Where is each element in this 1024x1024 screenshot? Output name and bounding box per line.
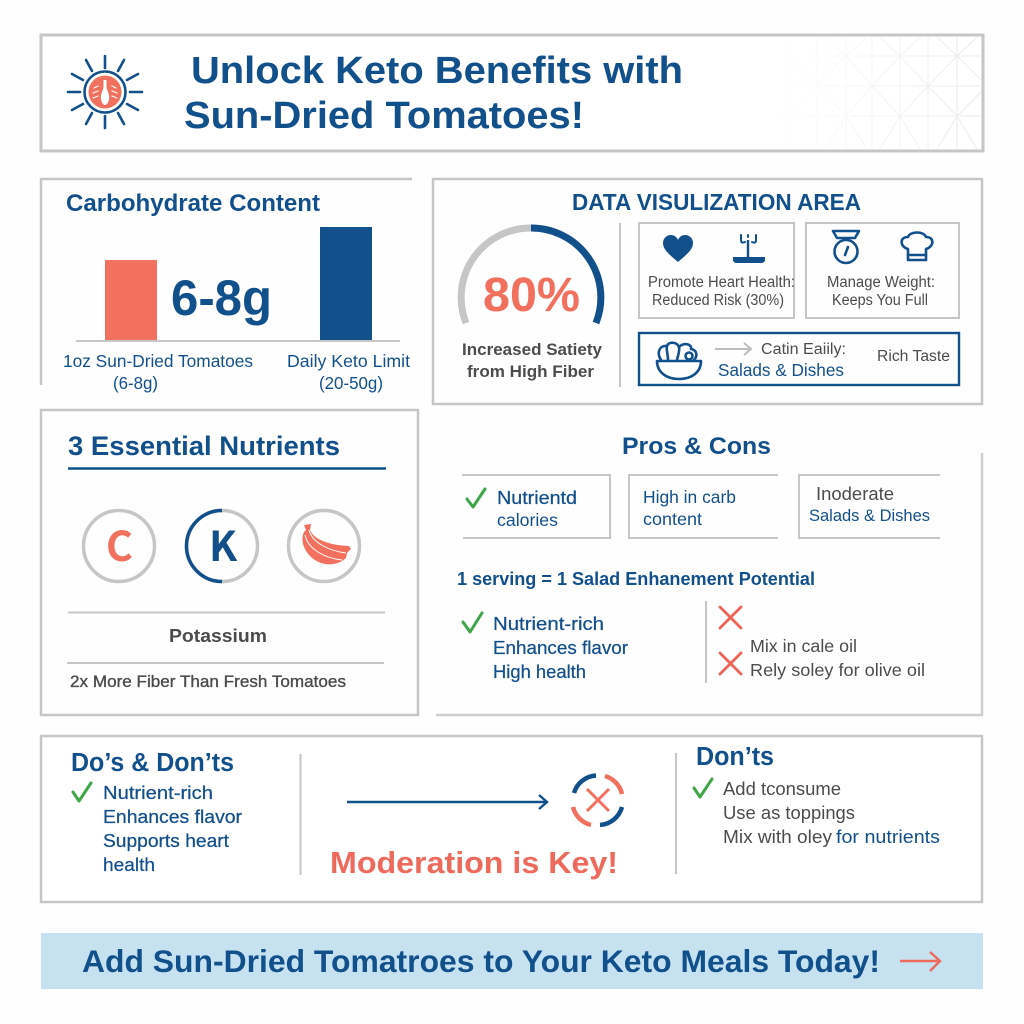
- arrow: [347, 795, 547, 809]
- bar chart: [63, 227, 410, 393]
- arrow: [715, 343, 751, 355]
- do's list: health: [103, 854, 155, 875]
- bar chart: 6-8g: [171, 270, 272, 326]
- call to action banner: [41, 933, 983, 989]
- card: nutrient calories: Nutrientd: [497, 487, 577, 508]
- pros list: Enhances flavor: [493, 637, 628, 658]
- heading: Pros & Cons: [622, 433, 771, 460]
- icon: antenna router: [733, 235, 765, 263]
- icon: cross: [720, 607, 741, 628]
- heading: don'ts: Don’ts: [696, 743, 774, 771]
- title: [184, 50, 683, 137]
- card: eat easily: [639, 333, 959, 385]
- card: heart health: Reduced Risk (30%): [652, 292, 784, 309]
- do's list: Nutrient-rich: [103, 782, 213, 803]
- title: Sun-Dried Tomatoes!: [184, 95, 584, 137]
- card: manage weight: [806, 223, 959, 318]
- icon: check: [463, 613, 482, 632]
- card: heart health: Promote Heart Health:: [648, 274, 795, 291]
- card: heart health: [639, 223, 795, 318]
- arrow: [900, 952, 940, 971]
- don'ts list: Mix with oley: [723, 827, 832, 847]
- gauge: 80% satiety: 80%: [483, 269, 580, 322]
- card: high in carb: [629, 475, 778, 538]
- panel: essential nutrients: [41, 410, 418, 715]
- bar chart: Daily Keto Limit: [287, 351, 410, 371]
- gauge: 80% satiety: from High Fiber: [467, 362, 594, 381]
- gauge: 80% satiety: [461, 228, 603, 381]
- title: Unlock Keto Benefits with: [191, 50, 683, 92]
- icon: check: [467, 489, 485, 507]
- icon: sun with tomato slice: [68, 56, 142, 128]
- do's list: [73, 782, 242, 875]
- bar chart: 1oz Sun-Dried Tomatoes: [63, 351, 253, 371]
- pros list: High health: [493, 661, 586, 682]
- pros list: [463, 613, 628, 682]
- don'ts list: for nutrients: [836, 827, 940, 847]
- don'ts list: Add tconsume: [723, 779, 841, 799]
- heading: Carbohydrate Content: [66, 190, 320, 217]
- heading: 3 Essential Nutrients: [68, 431, 340, 461]
- icon: cross: [720, 653, 741, 674]
- icon: vitamin C: [84, 510, 154, 582]
- label: potassium: Potassium: [169, 625, 267, 646]
- fiber note: 2x More Fiber Than Fresh Tomatoes: [70, 673, 346, 691]
- panel: carbohydrate content: [41, 179, 412, 393]
- gauge: 80% satiety: Increased Satiety: [462, 340, 603, 359]
- icon: banana: [288, 510, 360, 582]
- bar chart: (20-50g): [319, 373, 383, 393]
- icon: heart: [663, 235, 693, 262]
- panel: pros and cons: [436, 433, 982, 715]
- card: high in carb: content: [643, 509, 702, 529]
- cons list: Mix in cale oil: [750, 636, 857, 656]
- heading: do's: Do’s & Don’ts: [71, 749, 234, 777]
- card: eat easily: Rich Taste: [877, 348, 950, 365]
- don'ts list: [694, 779, 940, 847]
- card: moderate: Salads & Dishes: [809, 506, 930, 525]
- serving line: 1 serving = 1 Salad Enhanement Potential: [457, 569, 815, 589]
- card: manage weight: Keeps You Full: [832, 292, 928, 309]
- cons list: Rely soley for olive oil: [750, 660, 925, 680]
- do's list: Supports heart: [103, 830, 229, 851]
- icon: vitamin K: K: [209, 513, 238, 573]
- card: nutrient calories: calories: [497, 510, 558, 530]
- icon: chef hat: [902, 232, 932, 260]
- panel: data visualization area: [433, 179, 982, 404]
- card: eat easily: Salads & Dishes: [718, 360, 844, 380]
- do's list: Enhances flavor: [103, 806, 242, 827]
- icon: check: [694, 779, 712, 797]
- card: eat easily: Catin Eaiily:: [761, 341, 846, 358]
- call to action banner: Add Sun-Dried Tomatroes to Your Keto Meals Today!: [82, 943, 880, 979]
- pros list: Nutrient-rich: [493, 613, 604, 634]
- icon: vitamin C: C: [106, 513, 133, 573]
- don'ts list: Use as toppings: [723, 803, 855, 823]
- panel: do's and don'ts: [41, 736, 982, 902]
- card: moderate: Inoderate: [816, 484, 894, 504]
- card: manage weight: Manage Weight:: [827, 274, 935, 291]
- card: moderate: [799, 475, 940, 538]
- card: high in carb: High in carb: [643, 487, 736, 507]
- icon: vitamin K: [186, 510, 258, 582]
- icon: check: [73, 783, 91, 801]
- card: nutrient calories: [462, 475, 610, 538]
- icon: dashed ring with cross: [573, 776, 622, 825]
- callout: moderation: Moderation is Key!: [330, 845, 618, 880]
- heading: DATA VISULIZATION AREA: [572, 189, 861, 215]
- panel: header: [41, 35, 983, 151]
- icon: kitchen scale: [833, 231, 859, 263]
- bar chart: (6-8g): [113, 373, 158, 393]
- icon: salad bowl: [657, 343, 701, 379]
- cons list: [720, 607, 925, 680]
